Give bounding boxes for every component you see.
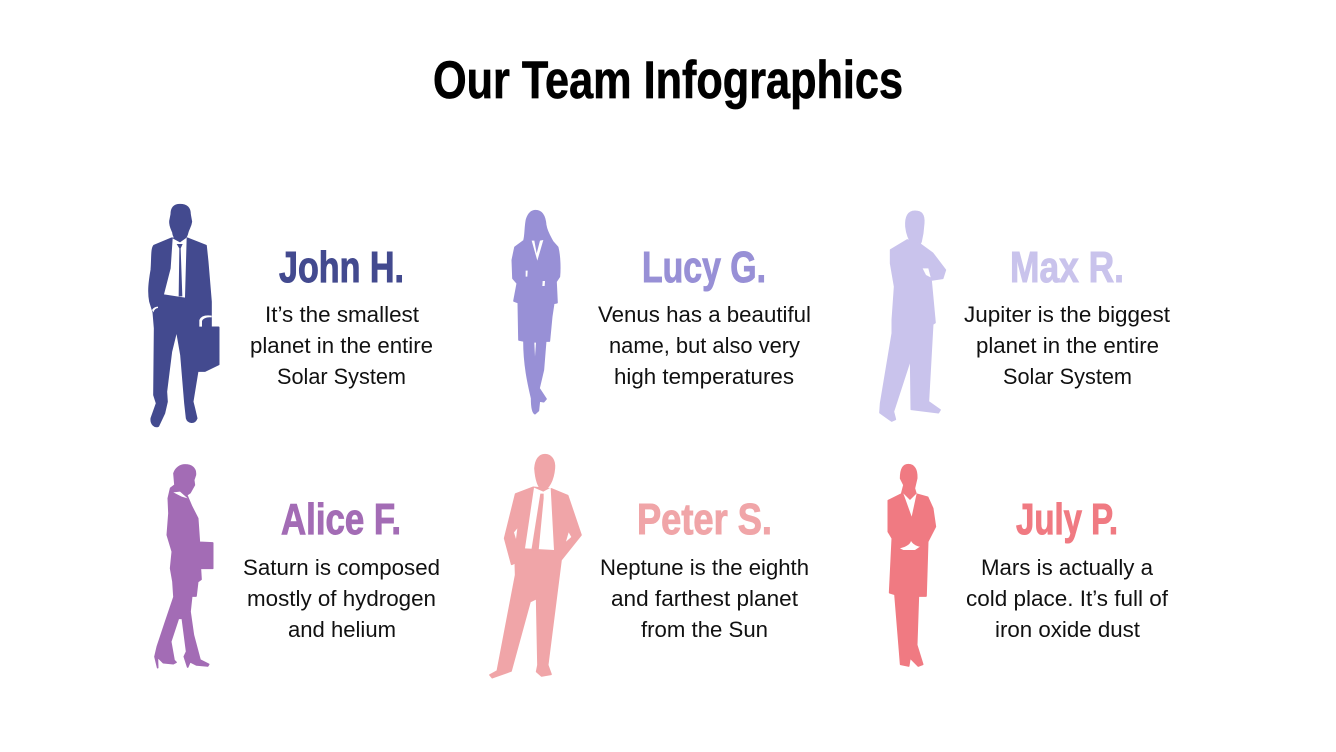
name: Lucy G. <box>642 243 766 292</box>
icon: man with hands in pockets silhouette <box>490 455 581 678</box>
description: Solar System <box>1003 364 1132 389</box>
description <box>250 302 433 389</box>
description: and helium <box>288 617 396 642</box>
description: planet in the entire <box>250 333 433 358</box>
description: high temperatures <box>614 364 794 389</box>
title: Our Team Infographics <box>433 51 903 110</box>
description: from the Sun <box>641 617 768 642</box>
icon: woman in long coat silhouette <box>888 465 935 666</box>
panel: Peter S. <box>490 455 809 678</box>
description <box>964 302 1170 389</box>
description: Neptune is the eighth <box>600 555 809 580</box>
description: Solar System <box>277 364 406 389</box>
description: It’s the smallest <box>265 302 419 327</box>
panel: Max R. <box>880 211 1170 421</box>
icon: woman in skirt suit silhouette <box>512 211 560 414</box>
name: July P. <box>1016 495 1118 544</box>
description: Venus has a beautiful <box>598 302 811 327</box>
name: Max R. <box>1010 243 1124 292</box>
icon: woman with folder silhouette <box>155 465 213 668</box>
description: planet in the entire <box>976 333 1159 358</box>
panel: July P. <box>888 465 1169 666</box>
description <box>598 302 811 389</box>
icon: man with crossed arms silhouette <box>880 211 945 421</box>
description: mostly of hydrogen <box>247 586 436 611</box>
icon: man with briefcase silhouette <box>149 205 219 426</box>
name: Alice F. <box>281 495 401 544</box>
panel: John H. <box>149 205 433 426</box>
panel: Alice F. <box>155 465 440 668</box>
name: Peter S. <box>637 495 772 544</box>
description <box>966 555 1169 642</box>
description <box>243 555 440 642</box>
description <box>600 555 809 642</box>
description: iron oxide dust <box>995 617 1140 642</box>
description: and farthest planet <box>611 586 798 611</box>
name: John H. <box>279 243 404 292</box>
description: Saturn is composed <box>243 555 440 580</box>
description: Jupiter is the biggest <box>964 302 1170 327</box>
description: name, but also very <box>609 333 800 358</box>
description: cold place. It’s full of <box>966 586 1169 611</box>
panel: Lucy G. <box>512 211 811 414</box>
description: Mars is actually a <box>981 555 1154 580</box>
